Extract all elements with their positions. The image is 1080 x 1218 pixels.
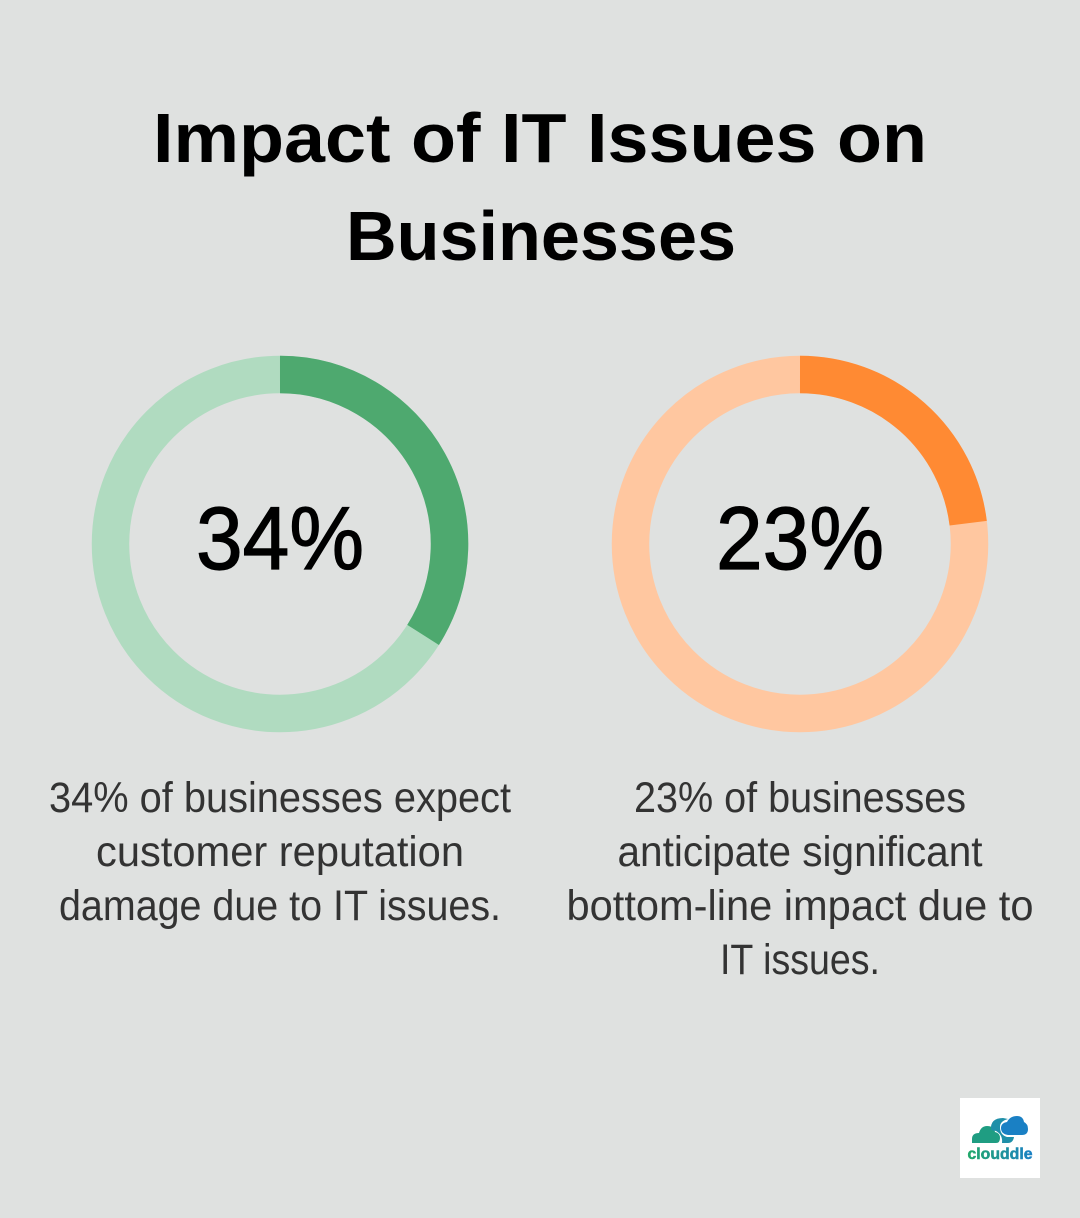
description: 34%: 34% of businesses expect <box>49 774 511 822</box>
icon: right cloud <box>1001 1116 1028 1135</box>
description: 23%: 23% of businesses <box>634 774 966 822</box>
description: 23%: IT issues. <box>720 936 880 984</box>
logo: clouddle <box>960 1098 1040 1178</box>
panel: 34% customer reputation damage <box>49 374 511 930</box>
description: 34%: damage due to IT issues. <box>59 882 501 930</box>
title: Impact of IT Issues on <box>153 99 927 177</box>
description: 34% <box>49 774 511 930</box>
description: 23%: anticipate significant <box>618 828 983 876</box>
description: 34%: customer reputation <box>96 828 464 876</box>
value: 23%: 23% <box>716 488 884 588</box>
donut chart: 23% <box>630 374 970 714</box>
value: 34%: 34% <box>196 488 364 588</box>
icon: left cloud <box>972 1126 1000 1143</box>
donut chart: 34% <box>110 374 450 714</box>
panel: 23% bottom-line impact <box>566 374 1034 984</box>
logo wordmark: clouddle <box>968 1146 1033 1163</box>
title: Businesses <box>346 197 736 275</box>
description: 23%: bottom-line impact due to <box>566 882 1034 930</box>
icon: middle cloud swoosh <box>991 1118 1014 1143</box>
description: 23% <box>566 774 1034 984</box>
title <box>153 99 927 275</box>
